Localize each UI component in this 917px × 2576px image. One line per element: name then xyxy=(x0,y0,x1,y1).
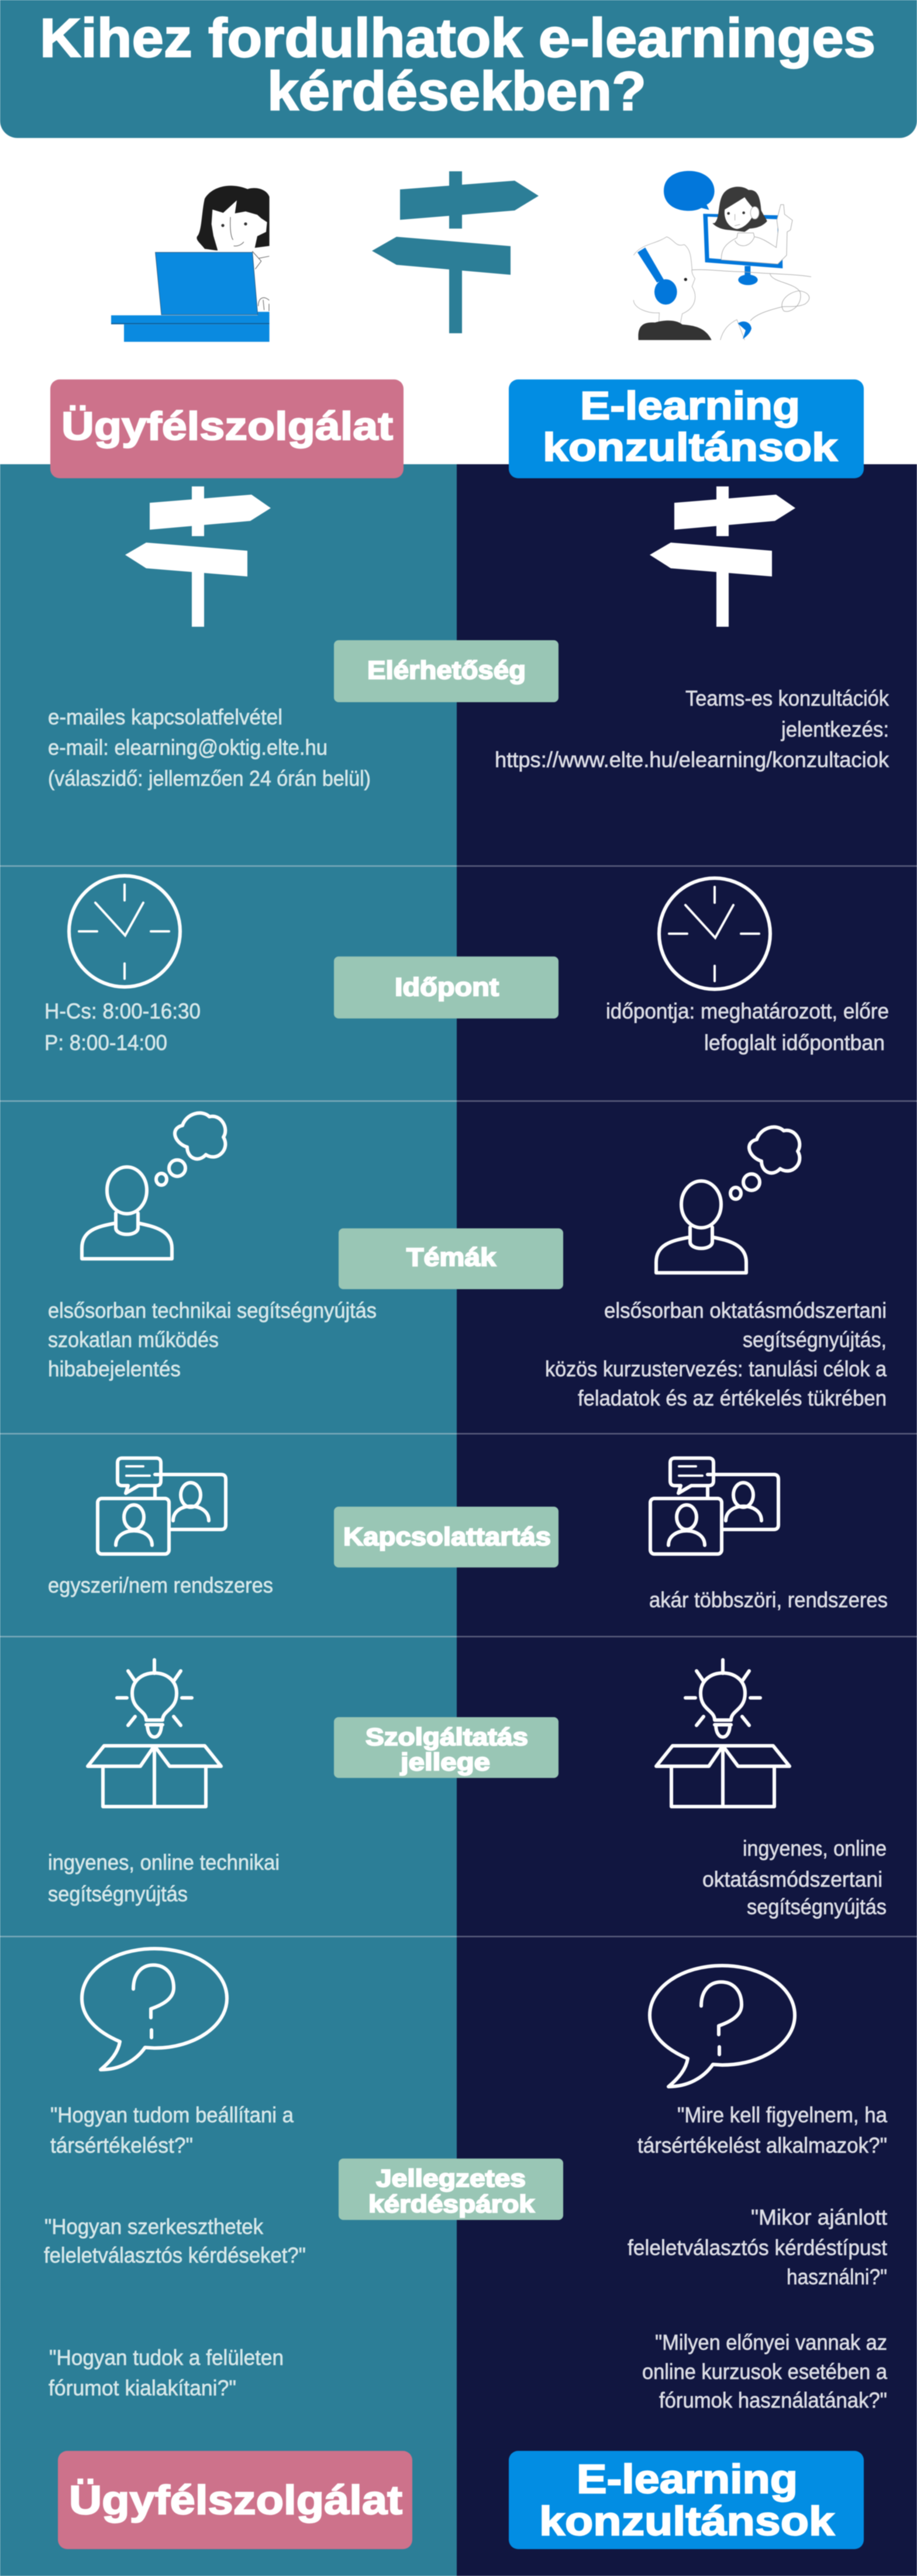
text: one-off contact: egyszeri/nem rendszeres xyxy=(48,1573,273,1597)
button: E-learning konzultánsok (top): konzultánsok xyxy=(543,425,837,469)
section: Témák xyxy=(48,1113,887,1410)
text: question 2 right: "Mikor ajánlott xyxy=(751,2205,888,2229)
text: free technical help: ingyenes, online technikai xyxy=(48,1850,280,1874)
icon: signpost left xyxy=(125,486,271,627)
text: opening hours xyxy=(44,999,201,1055)
label: Jellegzetes kérdéspárok xyxy=(339,2159,563,2220)
text: question 2 right: feleletválasztós kérdéstípust xyxy=(628,2236,888,2260)
text: consultant contact: jelentkezés: xyxy=(781,717,889,741)
header banner xyxy=(0,0,917,138)
section: Jellegzetes kérdéspárok xyxy=(44,1949,888,2412)
text: question 1 left: "Hogyan tudom beállítani a xyxy=(50,2103,294,2127)
text: question 2 left: feleletválasztós kérdéseket?" xyxy=(44,2243,306,2267)
text: consultant contact xyxy=(495,686,889,772)
label: Időpont: Időpont xyxy=(395,973,499,1002)
label: Időpont xyxy=(334,956,559,1018)
text: consultation time: időpontja: meghatározott, előre xyxy=(606,999,889,1023)
text: consultant topics xyxy=(545,1299,887,1410)
text: question 1 right: "Mire kell figyelnem, ha xyxy=(677,2103,887,2127)
text: consultation time xyxy=(606,999,889,1055)
text: question 1 left: társértékelést?" xyxy=(50,2133,193,2157)
icon: thinking person right xyxy=(656,1127,799,1273)
button: E-learning konzultánsok (bottom): konzultánsok xyxy=(539,2498,835,2544)
text: question 2 right xyxy=(628,2205,888,2289)
section: Kapcsolattartás xyxy=(48,1458,888,1612)
illustration: online consultation xyxy=(633,171,811,340)
icon: clock left xyxy=(69,876,180,987)
button: E-learning konzultánsok (bottom) xyxy=(509,2451,864,2549)
text: consultant contact: https://www.elte.hu/elearning/konzultaciok xyxy=(495,748,889,772)
label: Témák: Témák xyxy=(406,1243,497,1272)
text: consultation time: lefoglalt időpontban xyxy=(704,1031,885,1055)
label: Elérhetőség xyxy=(334,640,559,702)
text: question 1 left xyxy=(50,2103,294,2157)
icon: video call right xyxy=(650,1458,778,1554)
button: Ügyfélszolgálat (top) xyxy=(50,379,404,478)
text: consultant topics: közös kurzustervezés: tanulási célok a xyxy=(545,1357,887,1381)
icon: box with light bulb left xyxy=(88,1660,221,1807)
icon: thinking person left xyxy=(82,1113,225,1259)
label: Jellegzetes kérdéspárok: kérdéspárok xyxy=(368,2190,535,2218)
text: customer service contact: e-mailes kapcsolatfelvétel xyxy=(48,705,282,729)
text: question 3 right: fórumok használatának?" xyxy=(659,2388,887,2412)
button: E-learning konzultánsok (bottom): E-learning xyxy=(577,2456,798,2502)
icon: teal signpost xyxy=(372,171,539,333)
illustration: woman at laptop xyxy=(111,186,270,342)
text: customer service contact: e-mail: elearning@oktig.elte.hu xyxy=(48,735,328,759)
button: Ügyfélszolgálat (bottom) xyxy=(58,2451,412,2549)
text: free methodological help: oktatásmódszertani xyxy=(702,1867,882,1891)
label: Kapcsolattartás: Kapcsolattartás xyxy=(343,1522,551,1551)
button: Ügyfélszolgálat (top): Ügyfélszolgálat xyxy=(61,404,393,448)
text: opening hours: H-Cs: 8:00-16:30 xyxy=(44,999,201,1023)
icon: question bubble right xyxy=(650,1966,795,2087)
text: customer service topics: szokatlan működés xyxy=(48,1328,219,1352)
text: question 2 left: "Hogyan szerkeszthetek xyxy=(44,2215,263,2239)
text: question 2 left xyxy=(44,2215,306,2267)
section: Időpont xyxy=(44,876,889,1055)
section: Szolgáltatás jellege xyxy=(48,1660,887,1919)
text: question 2 right: használni?" xyxy=(787,2265,887,2289)
text: free methodological help: ingyenes, online xyxy=(743,1836,887,1860)
icon: signpost right xyxy=(650,486,795,627)
label: Elérhetőség: Elérhetőség xyxy=(367,656,526,685)
panel: left column background xyxy=(0,464,457,2576)
text: regular contact: akár többszöri, rendszeres xyxy=(649,1588,888,1612)
text: question 1 right: társértékelést alkalmazok?" xyxy=(637,2133,887,2157)
text: question 3 right: "Milyen előnyei vannak az xyxy=(655,2330,887,2354)
text: consultant topics: segítségnyújtás, xyxy=(743,1328,887,1352)
text: question 3 left: "Hogyan tudok a felületen xyxy=(49,2346,284,2370)
section: Elérhetőség xyxy=(48,486,889,790)
label: Szolgáltatás jellege xyxy=(334,1717,559,1778)
icon: clock right xyxy=(659,878,770,989)
text: question 3 left: fórumot kialakítani?" xyxy=(49,2376,236,2400)
icon: video call left xyxy=(98,1458,226,1554)
button: E-learning konzultánsok (top): E-learning xyxy=(580,384,800,428)
title: Kihez fordulhatok e-learninges xyxy=(40,7,875,68)
title: kérdésekben? xyxy=(267,60,646,122)
button: E-learning konzultánsok (top) xyxy=(509,379,864,478)
label: Szolgáltatás jellege: jellege xyxy=(400,1748,490,1776)
text: customer service topics xyxy=(48,1299,377,1381)
text: free technical help xyxy=(48,1850,280,1906)
text: free methodological help: segítségnyújtás xyxy=(747,1895,887,1919)
label: Kapcsolattartás xyxy=(334,1507,559,1567)
text: free methodological help xyxy=(702,1836,887,1919)
label: Témák xyxy=(339,1228,563,1289)
text: consultant topics: feladatok és az értékelés tükrében xyxy=(578,1386,887,1410)
text: question 3 left xyxy=(49,2346,284,2400)
text: question 1 right xyxy=(637,2103,887,2157)
text: question 3 right: online kurzusok esetében a xyxy=(642,2360,887,2384)
text: question 3 right xyxy=(642,2330,887,2412)
text: customer service contact xyxy=(48,705,371,790)
text: consultant contact: Teams-es konzultációk xyxy=(685,686,889,710)
text: customer service topics: elsősorban technikai segítségnyújtás xyxy=(48,1299,377,1322)
panel: right column background xyxy=(457,464,917,2576)
text: free technical help: segítségnyújtás xyxy=(48,1882,188,1906)
text: consultant topics: elsősorban oktatásmódszertani xyxy=(604,1299,887,1322)
label: Szolgáltatás jellege: Szolgáltatás xyxy=(366,1723,528,1750)
label: Jellegzetes kérdéspárok: Jellegzetes xyxy=(376,2164,526,2192)
button: Ügyfélszolgálat (bottom): Ügyfélszolgálat xyxy=(69,2477,402,2523)
icon: question bubble left xyxy=(82,1949,227,2070)
text: opening hours: P: 8:00-14:00 xyxy=(44,1031,167,1055)
text: customer service contact: (válaszidő: jellemzően 24 órán belül) xyxy=(48,766,371,790)
title xyxy=(40,7,875,122)
icon: box with light bulb right xyxy=(656,1660,790,1807)
text: customer service topics: hibabejelentés xyxy=(48,1357,181,1381)
